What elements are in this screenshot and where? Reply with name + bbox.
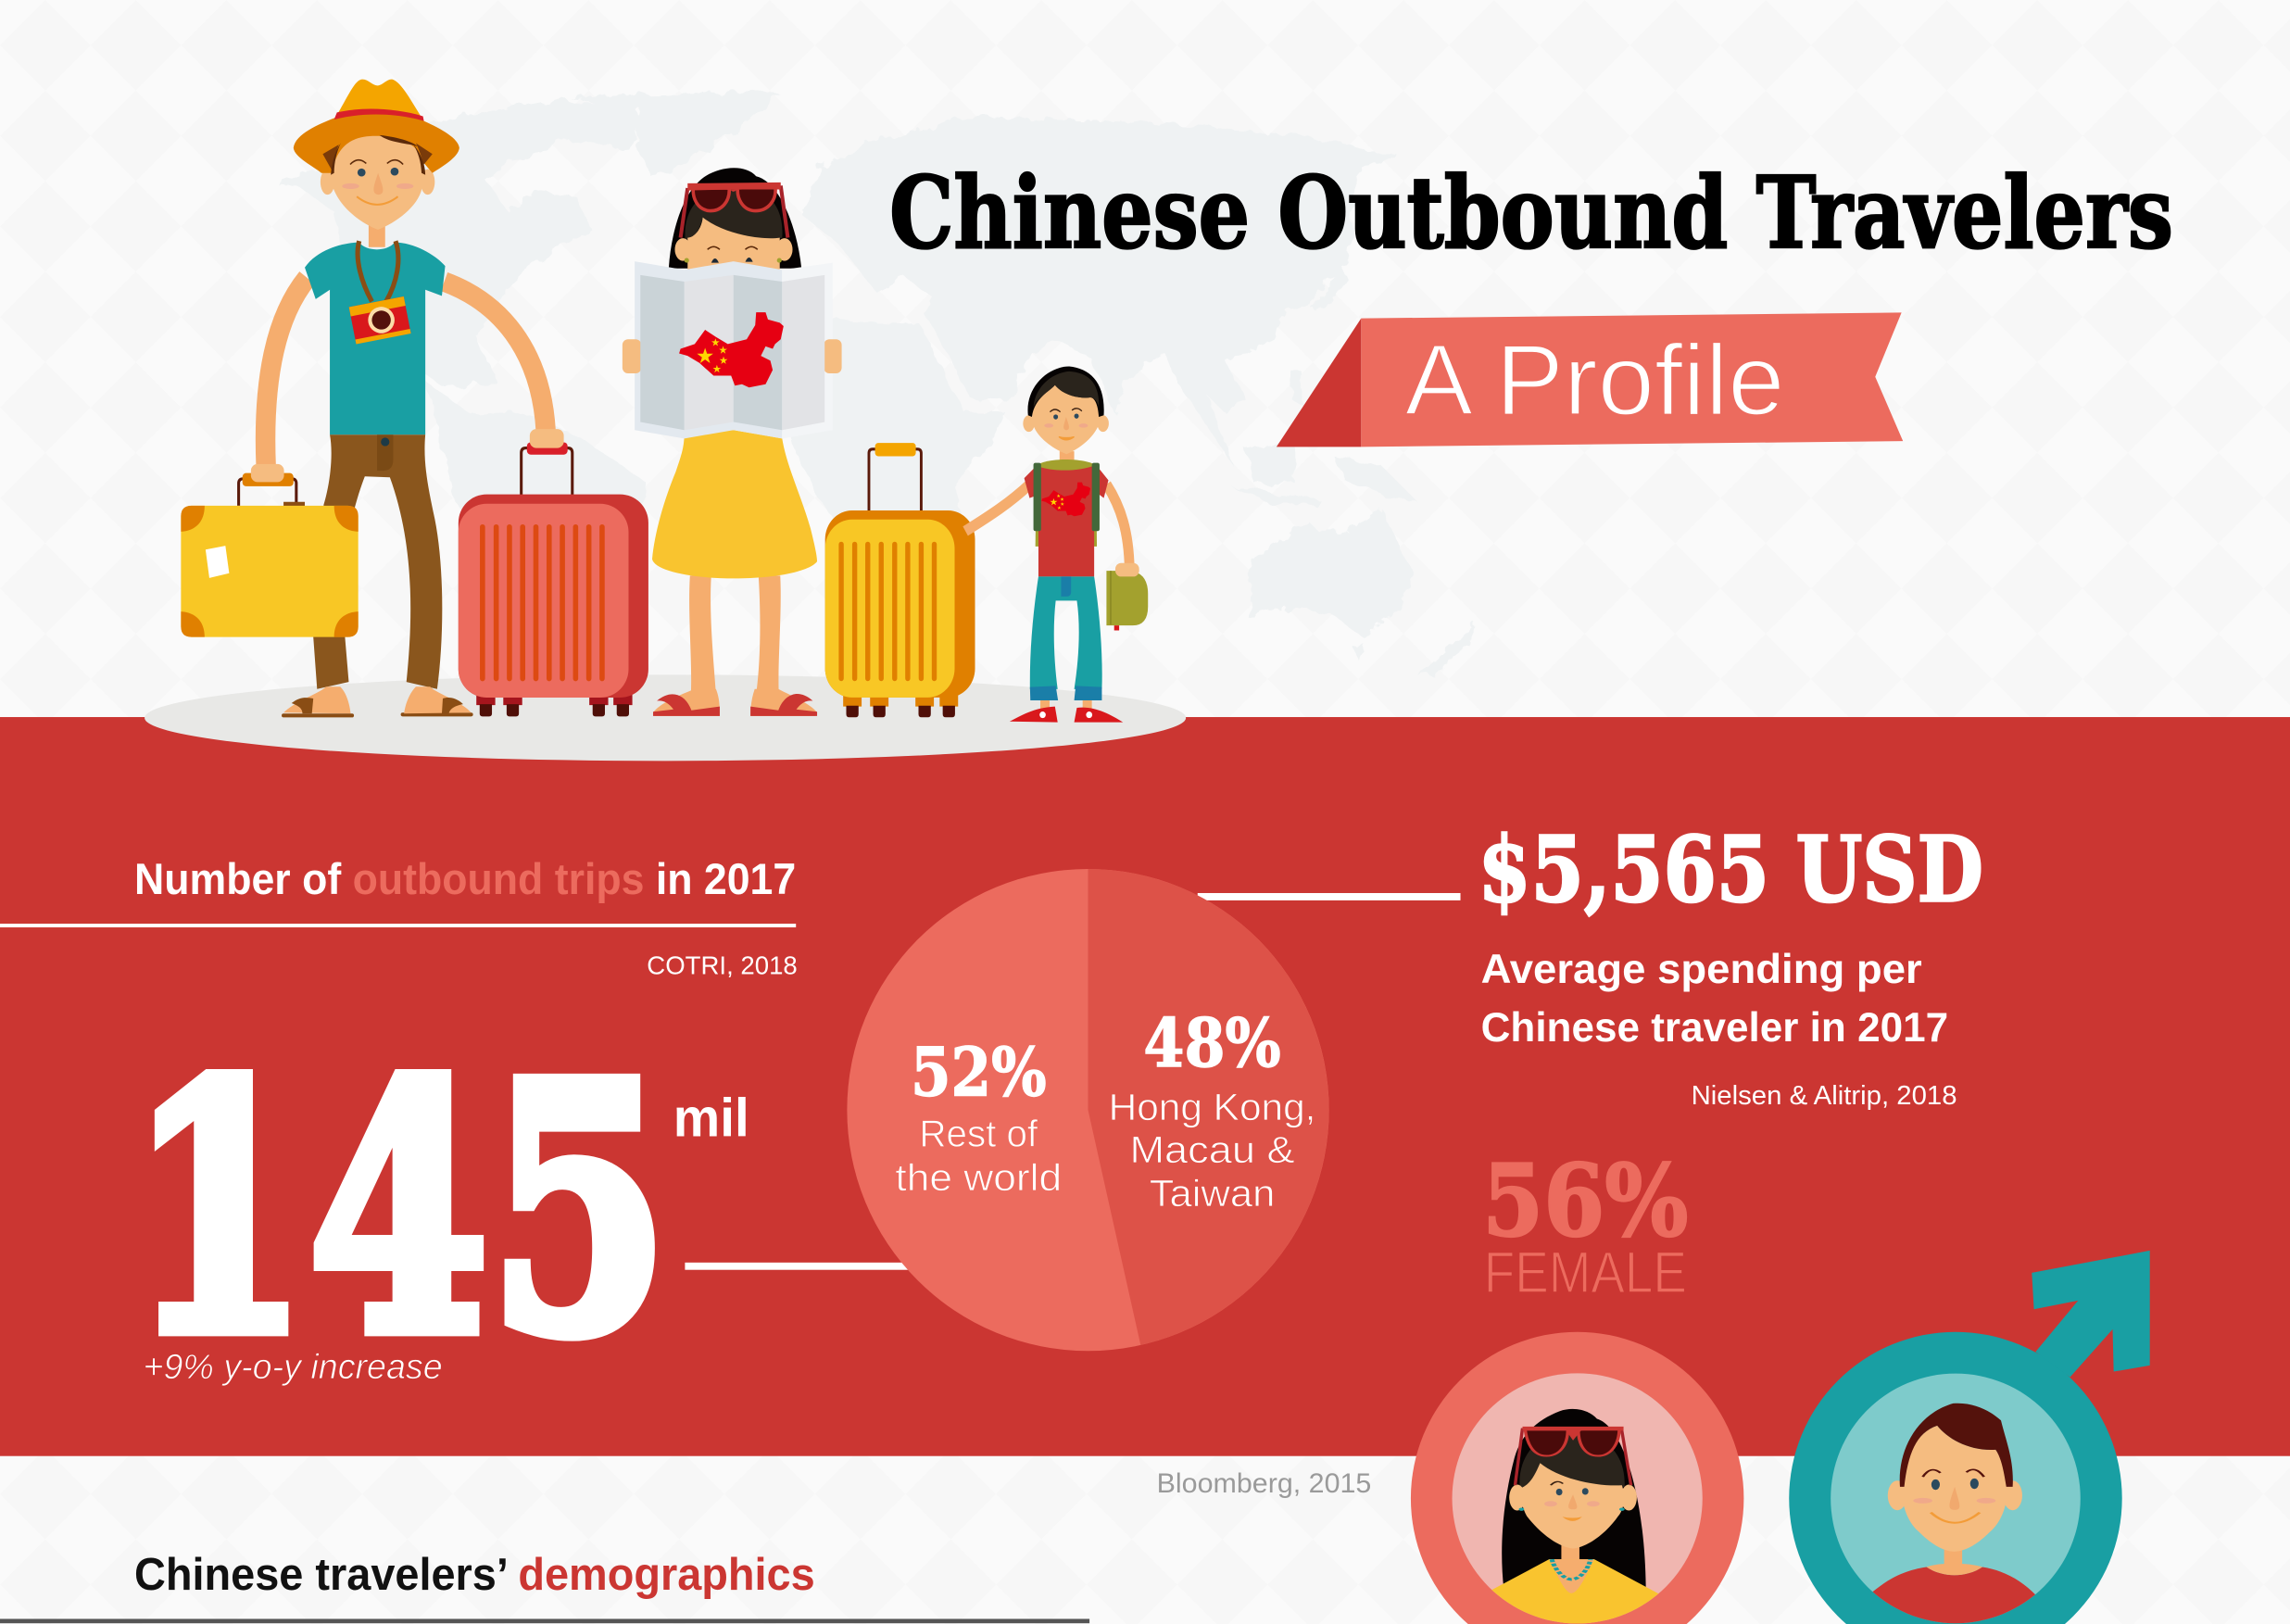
average spending description	[1481, 945, 1948, 1051]
pie label: Hong Kong, Macau, Taiwan	[1109, 1004, 1315, 1215]
average spending description: Chinese traveler in 2017	[1481, 1003, 1948, 1051]
average spending description: Average spending per	[1481, 945, 1922, 992]
floor ellipse	[145, 674, 1186, 761]
illustration: family of travelers with suitcases	[181, 80, 1148, 723]
source: Nielsen: Nielsen & Alitrip, 2018	[1692, 1081, 1957, 1111]
red stats band	[0, 717, 2290, 1456]
ribbon banner	[1277, 312, 1903, 447]
source: COTRI: COTRI, 2018	[647, 950, 798, 979]
heading: number of outbound trips: Number of outbound trips in 2017	[134, 855, 796, 904]
pie label: Hong Kong, Macau, Taiwan: Macau &	[1129, 1128, 1295, 1171]
folded map	[623, 261, 842, 438]
woman reading a map of China	[623, 168, 842, 716]
pie label: rest of the world: the world	[895, 1156, 1062, 1199]
56% female: 56%	[1482, 1143, 1688, 1260]
pie label: rest of the world: 52%	[911, 1033, 1047, 1112]
world map backdrop	[278, 92, 1475, 676]
source: Bloomberg: Bloomberg, 2015	[1157, 1469, 1371, 1499]
man with hat and camera	[266, 80, 546, 715]
boy with backpack and book	[965, 367, 1148, 723]
pie label: rest of the world: Rest of	[919, 1113, 1038, 1155]
red suitcase	[459, 429, 648, 716]
demographics heading: Chinese travelers’ demographics	[134, 1550, 815, 1600]
pie label: Hong Kong, Macau, Taiwan: Hong Kong,	[1109, 1086, 1315, 1128]
ribbon banner: A Profile	[1405, 325, 1785, 437]
pie label: rest of the world	[895, 1033, 1062, 1199]
female portrait in coral circle	[1411, 1332, 1743, 1624]
pie chart: trip destinations	[847, 869, 1329, 1351]
56% female	[1482, 1143, 1688, 1305]
growth note: +9% y-o-y increase	[143, 1348, 443, 1387]
pie label: Hong Kong, Macau, Taiwan: Taiwan	[1150, 1172, 1275, 1215]
average spending figure: $5,565 USD	[1478, 817, 1983, 924]
56% female: FEMALE	[1484, 1240, 1687, 1305]
yellow briefcase	[181, 464, 359, 637]
yellow suitcase	[825, 443, 975, 717]
male portrait in teal male symbol	[1789, 1251, 2150, 1624]
big number 145 mil: 145	[129, 1010, 669, 1410]
pie label: Hong Kong, Macau, Taiwan: 48%	[1143, 1004, 1281, 1083]
big number 145 mil: mil	[673, 1088, 749, 1148]
